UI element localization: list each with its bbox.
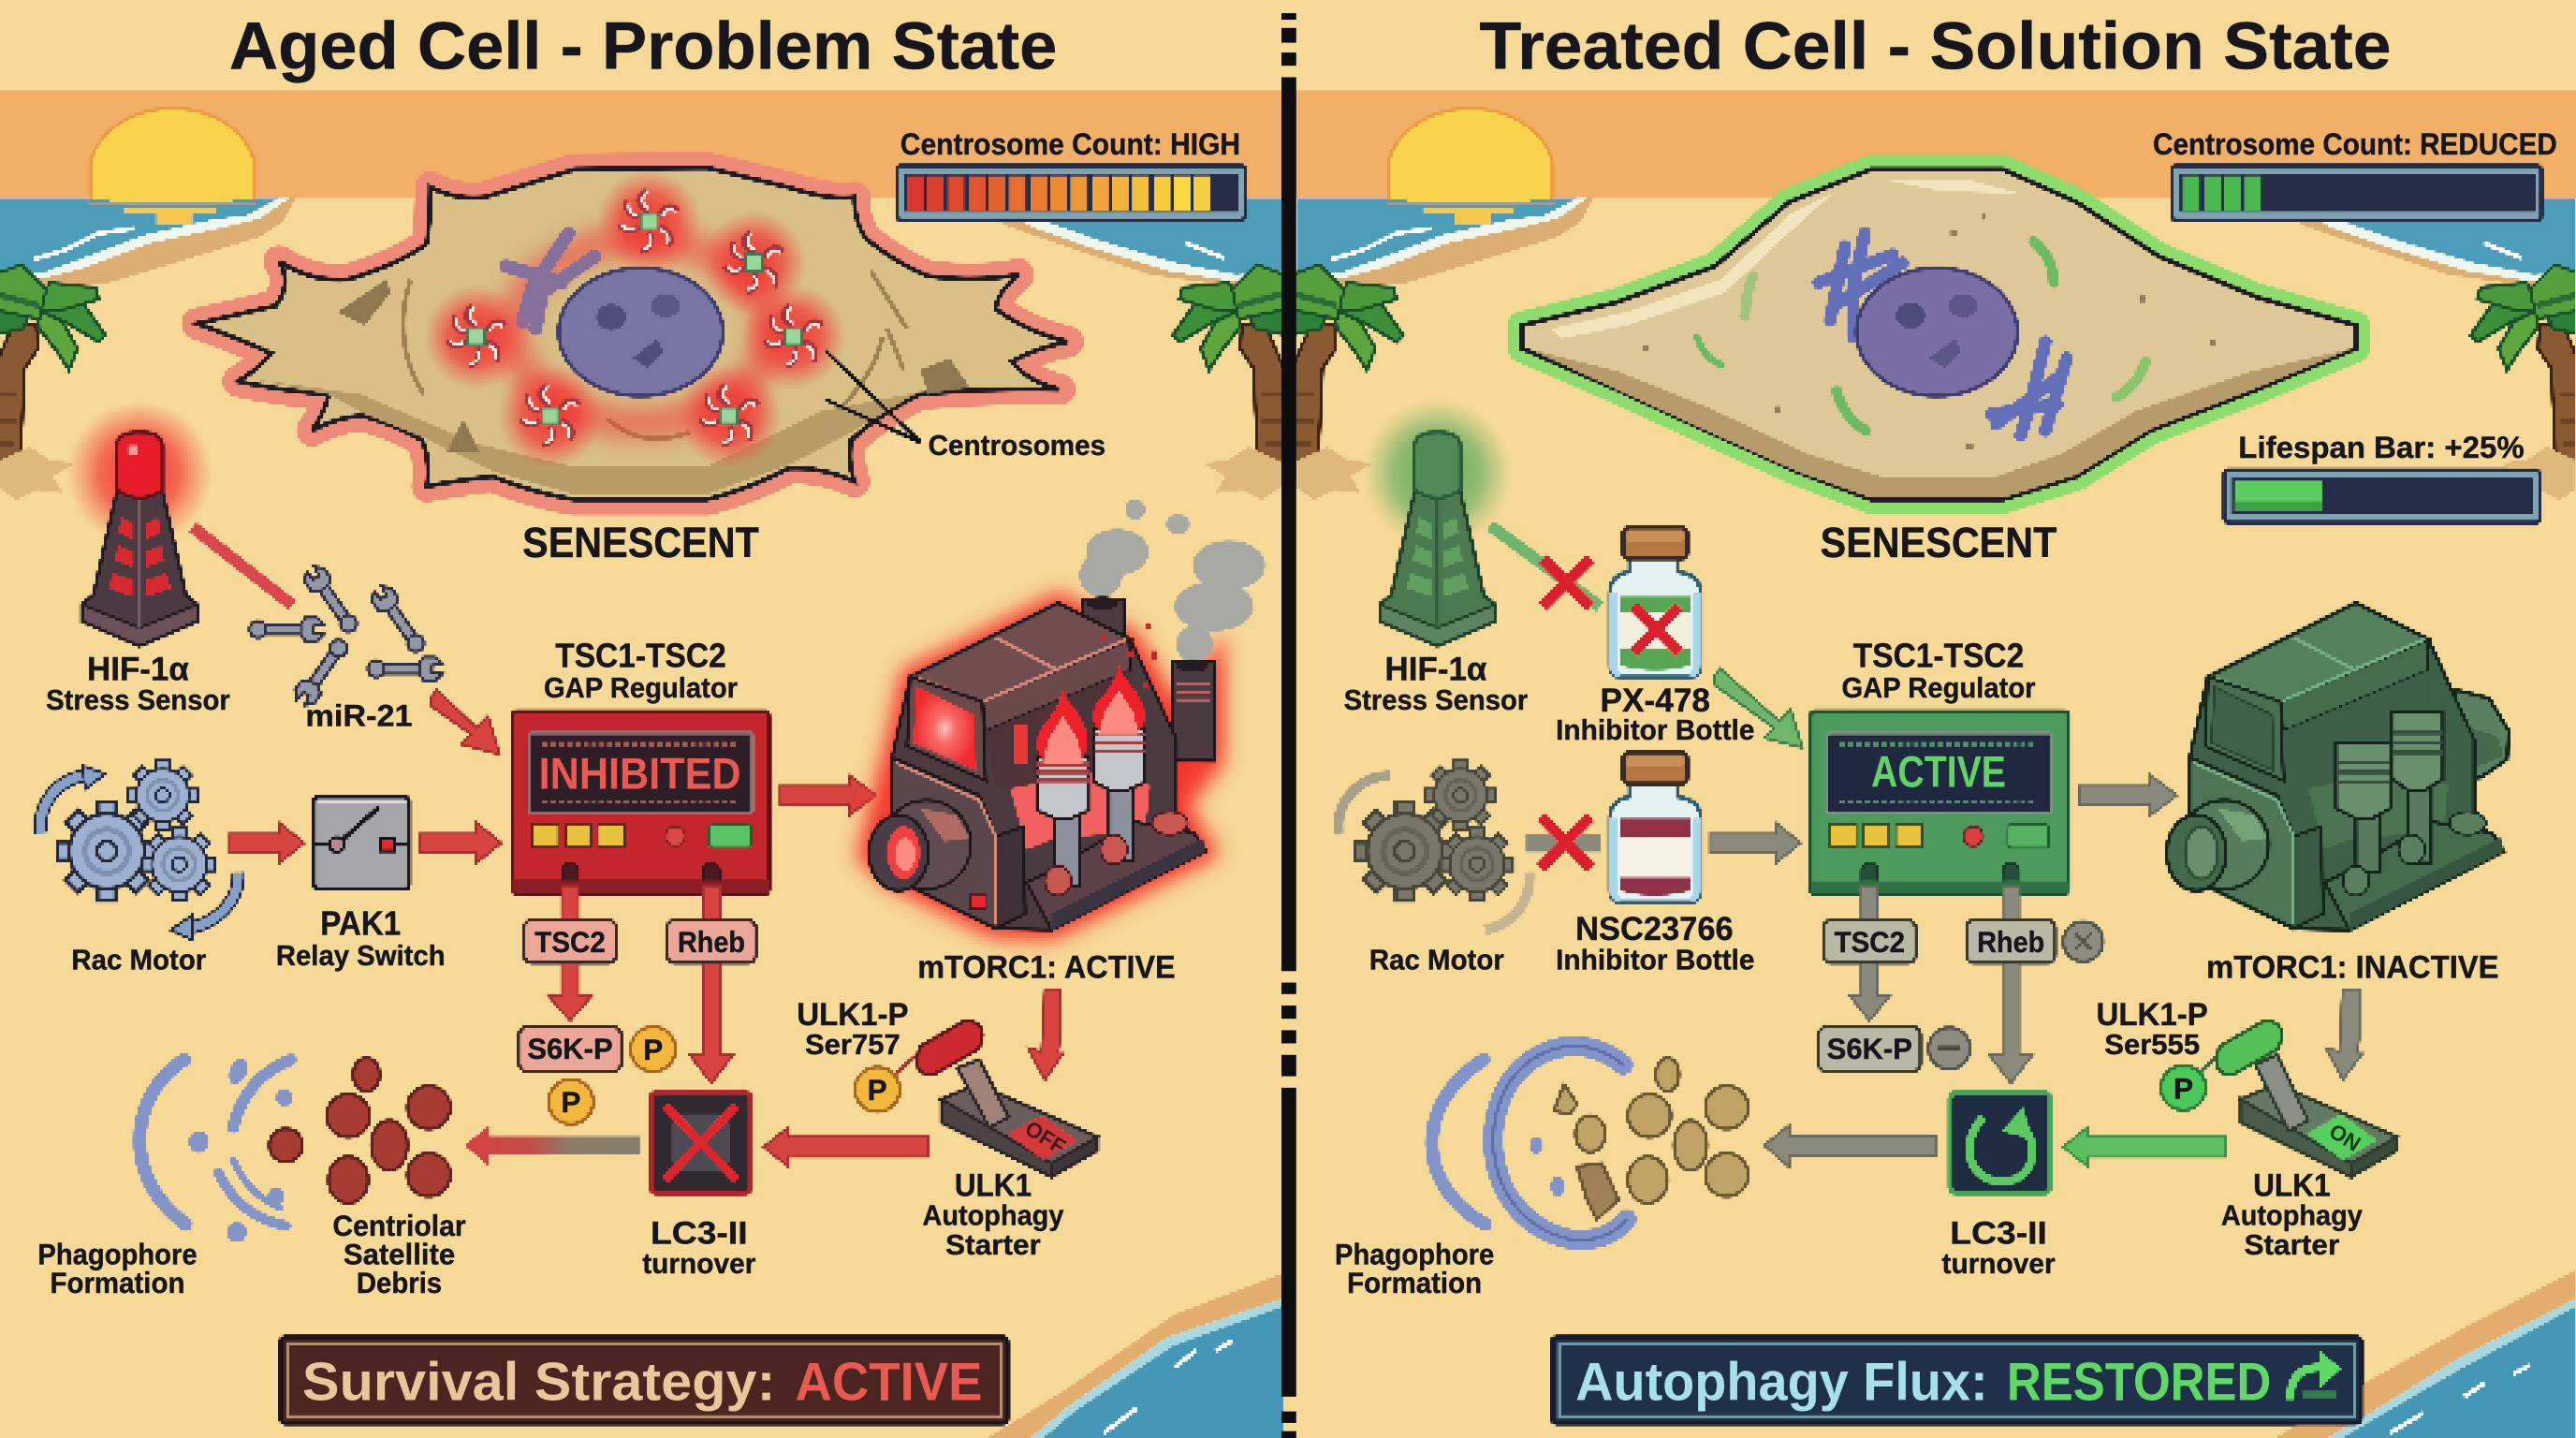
label: PX-478: PX-478 xyxy=(1600,682,1710,719)
label: S6K-P right: S6K-P xyxy=(1827,1032,1912,1065)
label: ULK1-P right: ULK1-P xyxy=(2097,997,2208,1033)
arrow: PAK1 to regulator xyxy=(420,823,501,862)
broken inhibition bar xyxy=(198,531,287,601)
top face xyxy=(910,603,1131,701)
engine red glow xyxy=(868,603,1214,930)
centrosome gauge reduced xyxy=(2172,166,2541,220)
chip: Rheb left xyxy=(667,920,755,962)
nucleus xyxy=(559,268,723,396)
screen text inhibited: INHIBITED xyxy=(539,749,741,799)
icon: tan debris being engulfed xyxy=(1554,1058,1748,1219)
callout lines xyxy=(825,350,920,442)
hot interior xyxy=(1010,772,1150,849)
icon: LC3-II recycling xyxy=(1950,1093,2050,1193)
red X over HIF line xyxy=(1543,559,1590,607)
label: OFF: OFF xyxy=(1021,1116,1070,1159)
label: miR-21: miR-21 xyxy=(305,699,413,733)
arrow: NSC to regulator xyxy=(1710,823,1801,862)
chip: Rheb right xyxy=(1967,920,2056,962)
label: Rheb right: Rheb xyxy=(1977,925,2044,959)
interior xyxy=(2308,772,2448,849)
cell body xyxy=(1522,169,2356,500)
label: mTORC1 inactive: mTORC1: INACTIVE xyxy=(2206,949,2499,985)
label: Ser555: Ser555 xyxy=(2104,1028,2200,1061)
panel: regulator inhibited xyxy=(513,712,768,894)
chromosome bottom xyxy=(1991,342,2067,435)
chip: S6K-P right xyxy=(1819,1027,1921,1071)
front cylinder xyxy=(869,800,971,890)
coin: P below S6K-P xyxy=(549,1079,593,1123)
panel: regulator active xyxy=(1810,712,2069,894)
icon: scattered wrenches miR-21 xyxy=(250,563,442,709)
label: TSC2 left: TSC2 xyxy=(534,925,606,959)
side band xyxy=(983,639,1131,731)
banner: survival strategy xyxy=(281,1338,1007,1423)
nucleus xyxy=(1856,268,2017,396)
icon: red centriolar debris xyxy=(270,1058,450,1203)
label: TSC1-TSC2 right: TSC1-TSC2 xyxy=(1853,637,2024,675)
label: senescent left: SENESCENT xyxy=(522,519,759,566)
base plate xyxy=(2324,822,2504,930)
label: TSC1-TSC2 left: TSC1-TSC2 xyxy=(555,637,726,675)
label: Rheb left: Rheb xyxy=(678,925,745,959)
icon: PX-478 bottle xyxy=(1610,527,1701,677)
window face xyxy=(907,677,986,781)
banner text pale: Autophagy Flux: xyxy=(1575,1352,1988,1412)
icon: palm left panel left xyxy=(0,265,105,500)
label: ON: ON xyxy=(2325,1119,2365,1156)
pistons and flames xyxy=(1036,666,1145,886)
label: NSC inhibitor bottle: Inhibitor Bottle xyxy=(1556,944,1754,976)
chromosome xyxy=(506,233,594,329)
label: ULK1 right: ULK1 xyxy=(2253,1168,2331,1204)
blocked gray stub xyxy=(1526,834,1600,852)
title right: Treated Cell - Solution State xyxy=(1479,10,2392,84)
coin: green P xyxy=(2161,1055,2217,1110)
label: debris: Debris xyxy=(357,1266,442,1299)
window face xyxy=(2204,677,2284,781)
coin: minus xyxy=(1928,1028,1969,1069)
label: autophagy left: Autophagy xyxy=(922,1198,1063,1231)
mitochondria xyxy=(1697,242,2145,431)
label: GAP regulator left: GAP Regulator xyxy=(544,671,738,704)
flywheel xyxy=(2456,690,2509,781)
label: phagophore left: Phagophore xyxy=(37,1238,198,1271)
ocean left shore left panel xyxy=(0,198,296,289)
icon: HIF-1 alpha green tower xyxy=(1364,399,1512,646)
stacks xyxy=(1083,596,1214,761)
base bolts and sparks xyxy=(1045,812,1188,896)
label: TSC2 right: TSC2 xyxy=(1835,925,1905,959)
bottom right wave left panel xyxy=(986,1273,1283,1438)
arrows down from regulator xyxy=(549,888,733,1083)
icon: completed phagophore xyxy=(1432,1047,1627,1240)
arrow: fading to debris xyxy=(465,1125,639,1167)
label: ULK1 left: ULK1 xyxy=(955,1168,1032,1204)
banner text tan: Survival Strategy: xyxy=(302,1352,775,1412)
label: HIF-1a left: HIF-1α xyxy=(87,652,189,688)
label: ULK1-P left: ULK1-P xyxy=(797,997,909,1033)
chip: TSC2 right xyxy=(1823,920,1915,962)
label: PAK1: PAK1 xyxy=(320,904,401,943)
label: formation right: Formation xyxy=(1347,1266,1482,1299)
screen text active: ACTIVE xyxy=(1871,748,2006,798)
arrow: PX to regulator xyxy=(1714,668,1802,748)
coin: crossed inactive xyxy=(2063,922,2103,961)
icon: Rac motor inactive gears xyxy=(1339,761,1530,930)
solid engine silhouette xyxy=(892,603,1206,930)
centrosome gauge high xyxy=(897,166,1245,220)
label: relay switch: Relay Switch xyxy=(276,939,446,972)
cell halo xyxy=(198,168,1068,500)
label: GAP regulator right: GAP Regulator xyxy=(1841,671,2036,704)
label: Rac motor left: Rac Motor xyxy=(71,944,206,976)
icon: mTORC1 overheating engine xyxy=(868,500,1265,930)
icon: ULK1 lever off xyxy=(916,1021,1097,1177)
label: senescent right: SENESCENT xyxy=(1821,519,2057,566)
icon: LC3-II blocked xyxy=(651,1093,751,1193)
label: starter right: Starter xyxy=(2244,1228,2339,1261)
top face xyxy=(2208,603,2428,701)
center divider xyxy=(1281,13,1296,1438)
icon: palm left panel right xyxy=(1173,265,1288,500)
label: Rac motor right: Rac Motor xyxy=(1369,944,1504,976)
ocean left shore right panel xyxy=(1298,198,1593,289)
blocked green line xyxy=(1495,529,1595,603)
label: turnover left: turnover xyxy=(642,1247,755,1280)
arrow: ULK1 to LC3 xyxy=(764,1127,929,1167)
arrow: ULK1 green to LC3 xyxy=(2063,1127,2226,1167)
banner text green: RESTORED xyxy=(2007,1352,2271,1412)
label: satellite: Satellite xyxy=(344,1238,455,1271)
icon: palm right panel right xyxy=(2471,265,2576,500)
arrow: regulator to engine xyxy=(781,775,875,815)
label: S6K-P left: S6K-P xyxy=(527,1032,613,1065)
lifespan gauge xyxy=(2224,470,2539,522)
red centrosomes xyxy=(424,169,846,468)
arrow: gray to switch xyxy=(2326,990,2363,1079)
coin letter P right of chip: P xyxy=(643,1033,663,1066)
label: LC3-II left: LC3-II xyxy=(651,1216,748,1252)
banner: autophagy flux xyxy=(1553,1338,2361,1423)
solid engine silhouette xyxy=(2190,603,2504,930)
smoke xyxy=(1079,500,1265,662)
coin letter P Ser757: P xyxy=(868,1073,887,1107)
lower block xyxy=(2190,757,2293,929)
label: centrosomes: Centrosomes xyxy=(929,429,1105,462)
ocean right shore left panel xyxy=(970,198,1283,289)
chip: S6K-P left xyxy=(520,1027,621,1071)
label: PX inhibitor bottle: Inhibitor Bottle xyxy=(1556,713,1754,746)
icon: sun right panel xyxy=(1386,109,1554,225)
centrosome count label left: Centrosome Count: HIGH xyxy=(900,127,1240,161)
label: centriolar: Centriolar xyxy=(332,1209,466,1242)
red X over Rac line xyxy=(1541,816,1590,868)
cell green halo xyxy=(1522,169,2356,500)
base plate xyxy=(1027,822,1206,930)
arrow: gray to debris xyxy=(1764,1125,1937,1167)
icon: HIF-1 alpha red tower xyxy=(67,401,212,646)
label: autophagy right: Autophagy xyxy=(2221,1198,2363,1231)
label: Ser757: Ser757 xyxy=(805,1028,900,1061)
sunset sky band xyxy=(0,90,2576,198)
title left: Aged Cell - Problem State xyxy=(229,10,1057,84)
icon: ULK1 lever on xyxy=(2217,1021,2397,1177)
label: phagophore right: Phagophore xyxy=(1335,1238,1494,1271)
label: NSC23766: NSC23766 xyxy=(1575,911,1734,947)
coin: P at Ser757 xyxy=(856,1045,929,1111)
arrow: mTORC1 to switch xyxy=(1029,990,1063,1079)
icon: NSC23766 bottle xyxy=(1610,753,1701,902)
label: starter left: Starter xyxy=(945,1228,1041,1261)
label: formation left: Formation xyxy=(51,1266,184,1299)
coin letter P Ser555: P xyxy=(2174,1071,2193,1105)
red stress ring xyxy=(513,240,768,424)
bottom right wave right panel xyxy=(2274,1270,2576,1438)
chip: TSC2 left xyxy=(524,920,616,962)
label: stress sensor right: Stress Sensor xyxy=(1344,683,1528,716)
cell body xyxy=(198,168,1068,500)
ocean right shore right panel xyxy=(2267,198,2576,289)
icon: palm right panel left xyxy=(1288,265,1403,500)
icon: fragmented phagophore xyxy=(139,1056,292,1242)
arrow: gray to engine xyxy=(2080,775,2177,815)
label: turnover right: turnover xyxy=(1942,1247,2056,1280)
front cylinder green xyxy=(2167,800,2269,890)
arrow: Rac to PAK1 xyxy=(230,823,304,862)
arrows down from regulator right xyxy=(1850,888,2032,1083)
icon: mTORC1 inactive engine xyxy=(2167,603,2509,930)
lower block xyxy=(892,757,996,929)
icon: sun left panel xyxy=(89,109,256,225)
coin letter P below chip: P xyxy=(561,1085,580,1119)
label: HIF-1a right: HIF-1α xyxy=(1385,652,1487,688)
pistons green xyxy=(2336,712,2443,873)
chromosome top xyxy=(1819,233,1902,337)
label: stress sensor left: Stress Sensor xyxy=(46,683,230,716)
coin: P beside S6K-P xyxy=(631,1027,675,1071)
icon: PAK1 relay switch xyxy=(314,797,409,889)
label: LC3-II right: LC3-II xyxy=(1950,1216,2047,1252)
icon: Rac motor blue gears xyxy=(40,761,239,940)
lifespan label: Lifespan Bar: +25% xyxy=(2238,431,2525,464)
arrow: miR-21 to regulator xyxy=(431,690,500,755)
banner text red: ACTIVE xyxy=(795,1352,983,1412)
treated cell: smooth spindle cell xyxy=(1522,169,2356,500)
label: mTORC1 active: mTORC1: ACTIVE xyxy=(917,949,1176,985)
aged cell: senescent spiky cell xyxy=(198,168,1068,500)
